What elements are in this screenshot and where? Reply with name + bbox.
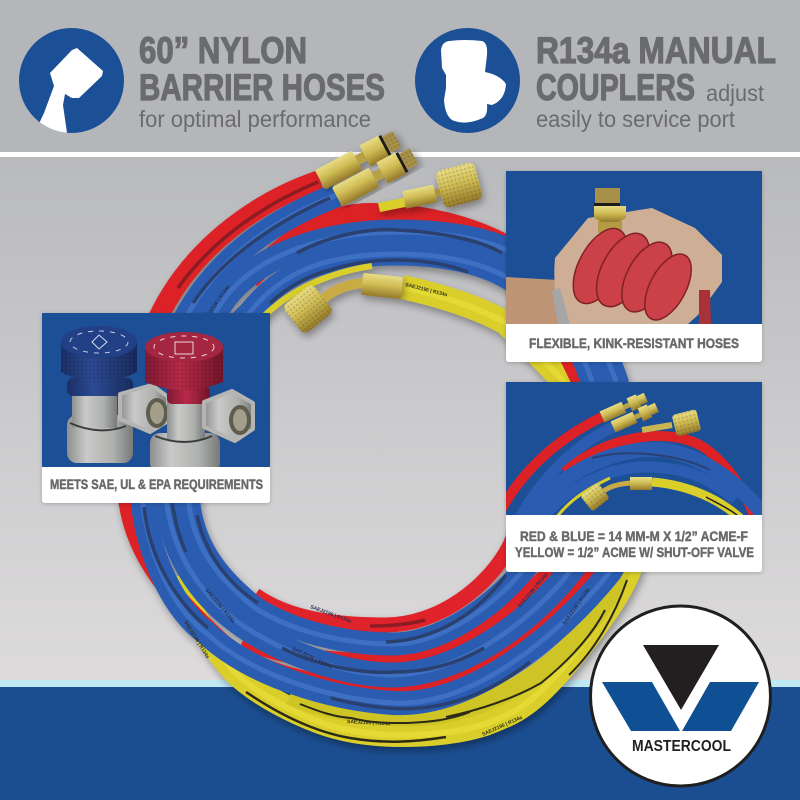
hose print text: SAEJ2196 | R134a (562, 587, 591, 626)
white divider bar (0, 152, 800, 157)
hose print text: SAEJ2196 | R134a (347, 719, 390, 727)
yellow sliver beneath top blue hose (262, 266, 372, 318)
heading: manual couplers: easily to service port (536, 106, 736, 132)
caption (515, 529, 754, 560)
hose print text (182, 282, 591, 738)
card base (42, 313, 270, 503)
panel: fitting sizes card (500, 382, 766, 572)
hose print text: SAEJ2196 | R134a (405, 282, 448, 298)
background: top grey band (0, 0, 800, 152)
mini hose photo (500, 382, 766, 518)
connector: yellow hose top valve (378, 161, 483, 212)
hand and hose photo (506, 171, 762, 327)
red coupler (145, 332, 253, 473)
heading: manual couplers (536, 30, 776, 132)
hose print text: SAEJ2196 | R134a (291, 646, 333, 670)
hose print text: SAEJ2196 | R134a (202, 284, 231, 323)
background: lower grey gradient (0, 157, 800, 680)
logo wordmark: MASTERCOOL (632, 738, 731, 755)
panel: couplers card (42, 313, 270, 503)
connector: blue hose fitting (331, 146, 419, 208)
logo: Mastercool badge (590, 606, 770, 786)
icon: coupler in blue circle (415, 28, 520, 133)
heading: nylon barrier hoses: BARRIER HOSES (139, 67, 385, 108)
caption: YELLOW = 1/2” ACME W/ SHUT-OFF VALVE (515, 545, 754, 560)
logo triangle (643, 645, 719, 710)
connector: yellow hose elbow valve (282, 273, 403, 335)
hose coil (124, 180, 640, 742)
coupler photo (42, 313, 270, 473)
heading: manual couplers: adjust (706, 80, 765, 106)
logo blue wings (602, 682, 759, 731)
heading: nylon barrier hoses: for optimal performance (139, 106, 371, 132)
heading: manual couplers: COUPLERS (536, 67, 695, 108)
blue coupler (61, 326, 168, 463)
caption: MEETS SAE, UL & EPA REQUIREMENTS (50, 477, 263, 492)
panel: flexible hoses card (506, 171, 762, 362)
heading: nylon barrier hoses: 60” NYLON (139, 30, 307, 71)
caption: RED & BLUE = 14 MM-M X 1/2” ACME-F (520, 529, 748, 544)
blue hoses (141, 195, 633, 709)
blue footer band (0, 687, 800, 800)
caption: FLEXIBLE, KINK-RESISTANT HOSES (529, 336, 739, 351)
yellow hoses (170, 287, 640, 742)
hose print text: SAEJ2196 | R134a (517, 572, 549, 609)
card base (506, 171, 762, 362)
hose print text: SAEJ2196 | R134a (203, 587, 236, 624)
connector: red hose fitting (314, 129, 402, 191)
hose print text: SAEJ2196 | R134a (309, 604, 352, 625)
light cyan strip (0, 680, 800, 687)
card base (506, 382, 762, 572)
red hoses (124, 180, 620, 692)
heading: nylon barrier hoses (139, 30, 385, 132)
hose print text: SAEJ2196 | R134a (182, 620, 210, 660)
icon: hose fitting in blue circle (19, 28, 124, 140)
hose print text: SAEJ2196 | R134a (481, 715, 523, 738)
